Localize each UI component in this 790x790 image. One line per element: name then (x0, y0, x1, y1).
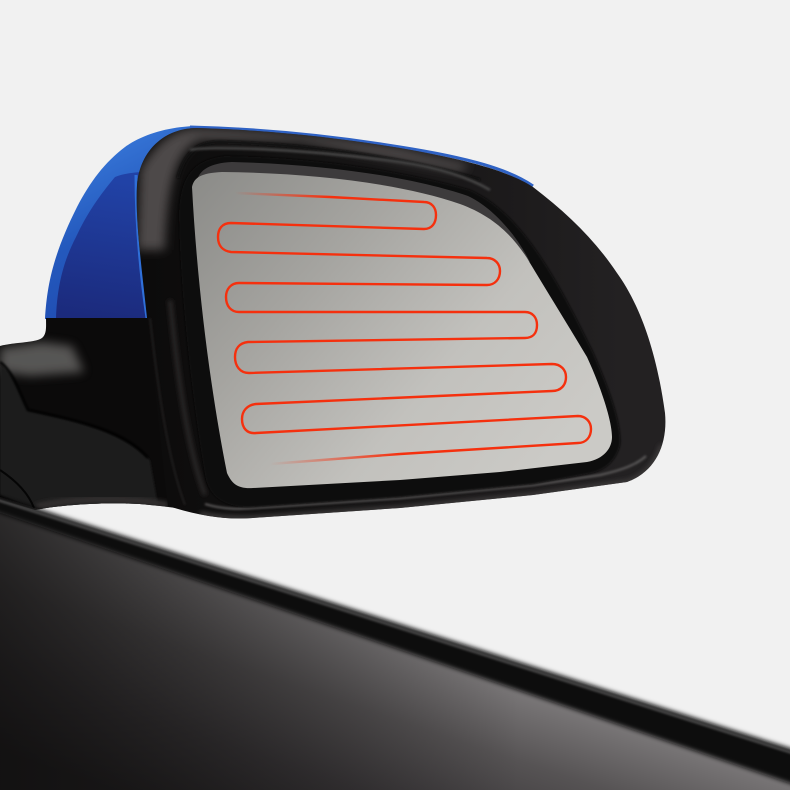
frame upper-left sheen (137, 128, 470, 250)
door window seal strip (0, 484, 790, 790)
glass top lip (197, 162, 530, 262)
frame bottom ridge (205, 456, 646, 509)
mirror housing frame (137, 128, 665, 518)
mirror arm mount (0, 318, 182, 510)
heating element line (218, 193, 591, 464)
blue mirror cap (45, 126, 533, 320)
mirror glass (192, 162, 612, 488)
car door panel (0, 484, 790, 790)
frame inner black recess (179, 156, 620, 507)
